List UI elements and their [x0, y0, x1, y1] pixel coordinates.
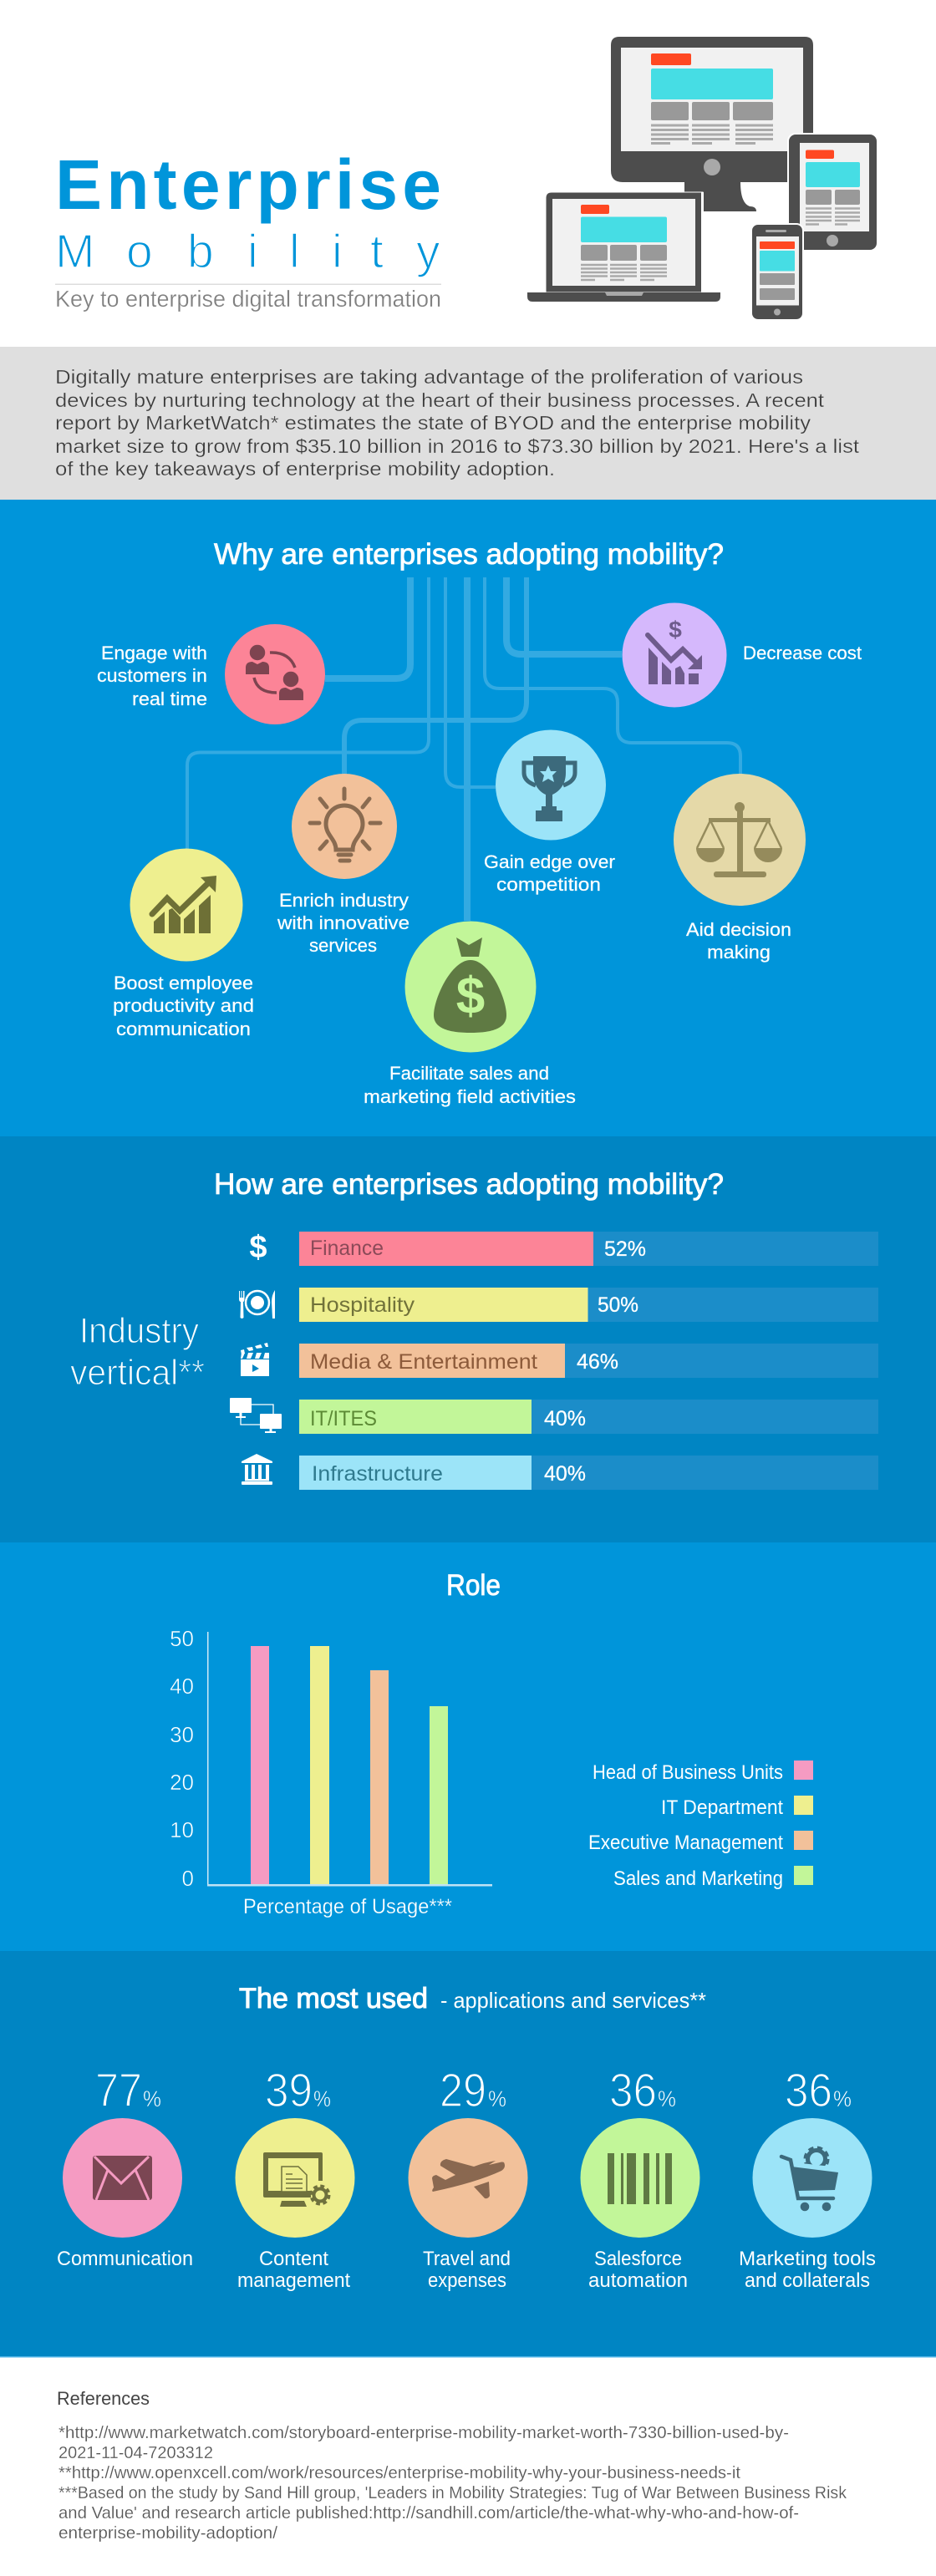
bar row: IT [230, 1398, 878, 1434]
icon: people exchange [246, 644, 303, 700]
bar row: hospitality [239, 1288, 878, 1322]
references: and Value' and research article published:http://sandhill.com/article/the-what-why-who-and-how-of- [58, 2503, 799, 2523]
item: boost productivity [113, 849, 254, 1039]
title block: Enterprise [55, 145, 441, 224]
bar row: infrastructure: 40% [544, 1462, 586, 1486]
item: marketing tools: 36 [785, 2064, 832, 2117]
bar row: media: 46% [577, 1350, 618, 1374]
item: communication [57, 2064, 193, 2270]
heading: why: Why are enterprises adopting mobility? [214, 538, 724, 571]
icon: bank building [242, 1454, 272, 1485]
bar row: infrastructure: Infrastructure [312, 1462, 443, 1486]
bar chart: percentage of usage [170, 1626, 492, 1918]
icon: money bag: $ [456, 968, 485, 1025]
item: travel and expenses: 29 [440, 2064, 486, 2117]
icon: plate and cutlery [239, 1290, 275, 1318]
panel: how adopting mobility [0, 1136, 936, 1542]
item: salesforce automation: Salesforce [594, 2248, 682, 2270]
item: enrich industry: Enrich industry [279, 890, 409, 911]
item: content management: % [313, 2086, 331, 2111]
item: travel and expenses [408, 2064, 528, 2292]
bar chart: percentage of usage: 40 [170, 1674, 194, 1699]
references: *http://www.marketwatch.com/storyboard-enterprise-mobility-market-worth-7330-billion-used-by- [58, 2423, 789, 2442]
label: industry vertical [70, 1311, 205, 1393]
icon: falling chart: $ [669, 617, 682, 643]
item: aid decision: making [707, 942, 771, 963]
icon: growth chart [152, 876, 216, 933]
heading: most used: The most used [239, 1983, 428, 2015]
icon: money bag [434, 937, 506, 1033]
item: facilitate sales: Facilitate sales and [389, 1063, 549, 1084]
panel: role [0, 1542, 936, 1951]
heading: most used: - applications and services** [440, 1988, 706, 2013]
legend: Executive Management [588, 1832, 783, 1854]
item: boost productivity: Boost employee [114, 973, 253, 993]
bar row: media: Media & Entertainment [310, 1350, 537, 1374]
item: travel and expenses: Travel and [423, 2248, 511, 2270]
bar row: hospitality: Hospitality [310, 1293, 415, 1317]
heading: most used [239, 1983, 706, 2015]
bar row: hospitality: 50% [598, 1293, 638, 1317]
item: facilitate sales: marketing field activities [364, 1086, 576, 1107]
icon: balance scale [696, 802, 782, 877]
item: engage with customers [97, 624, 325, 724]
item: engage with customers: real time [132, 688, 207, 709]
item: communication: % [143, 2086, 161, 2111]
icon: desktop monitor [611, 37, 813, 211]
icon: laptop [527, 192, 720, 302]
panel: introduction: Digitally mature enterprises are taking advantage of the proliferation of various [55, 366, 803, 388]
icon: networked computers [230, 1398, 282, 1433]
bar chart: percentage of usage: 0 [182, 1866, 194, 1891]
heading: role: Role [446, 1569, 501, 1602]
references [57, 2388, 847, 2543]
panel: introduction: devices by nurturing technology at the heart of their business processes. A recent [55, 389, 825, 411]
references: References [57, 2388, 150, 2409]
panel: most used applications [0, 1951, 936, 2358]
legend: Sales and Marketing [613, 1867, 783, 1890]
item: marketing tools [739, 2064, 876, 2292]
item: gain edge [484, 730, 615, 895]
bar chart: percentage of usage: 10 [170, 1817, 194, 1842]
bar chart: percentage of usage: 30 [170, 1722, 194, 1747]
panel: introduction: report by MarketWatch* estimates the state of BYOD and the enterprise mobility [55, 412, 811, 434]
bar row: IT: IT/ITES [310, 1407, 377, 1430]
label: industry vertical: Industry [79, 1311, 199, 1351]
heading: how: How are enterprises adopting mobility? [214, 1168, 724, 1201]
item: enrich industry [277, 774, 410, 956]
item: facilitate sales [364, 921, 576, 1107]
item: boost productivity: communication [116, 1019, 251, 1039]
references: **http://www.openxcell.com/work/resources/enterprise-mobility-why-your-business-needs-it [58, 2463, 740, 2482]
panel: introduction: market size to grow from $35.10 billion in 2016 to $73.30 billion by 2021. Here's a list [55, 435, 860, 457]
item: aid decision: Aid decision [686, 919, 791, 940]
bar row: media [241, 1343, 878, 1378]
icon: tablet [788, 134, 878, 251]
icon: falling chart [648, 617, 702, 684]
connector lines [187, 577, 740, 921]
bar row: finance: 52% [604, 1237, 646, 1261]
legend [588, 1761, 813, 1890]
item: content management: management [237, 2269, 350, 2292]
icon: clapperboard [241, 1343, 269, 1376]
icon: envelope [93, 2156, 152, 2200]
icon: monitor with document [263, 2152, 328, 2207]
bar chart: percentage of usage: 50 [170, 1626, 194, 1651]
icon: airplane [432, 2159, 505, 2198]
item: communication: Communication [57, 2248, 193, 2270]
item: gain edge: Gain edge over [484, 851, 615, 872]
bar row: finance [249, 1230, 878, 1266]
title block: Mobility [55, 225, 440, 278]
item: salesforce automation: automation [588, 2269, 688, 2292]
item: marketing tools: and collaterals [745, 2269, 870, 2292]
legend: Head of Business Units [593, 1761, 783, 1784]
item: decrease cost: Decrease cost [743, 643, 862, 663]
icon: dollar: $ [249, 1230, 267, 1265]
item: content management: Content [259, 2248, 328, 2270]
item: salesforce automation [580, 2064, 700, 2292]
item: salesforce automation: 36 [609, 2064, 657, 2117]
item: enrich industry: with innovative [277, 912, 410, 933]
item: engage with customers: customers in [97, 665, 207, 686]
item: content management [236, 2064, 354, 2292]
item: travel and expenses: expenses [428, 2269, 506, 2292]
bar row: IT: 40% [544, 1407, 586, 1430]
bar row: finance: Finance [310, 1237, 384, 1260]
references: enterprise-mobility-adoption/ [58, 2523, 277, 2543]
item: salesforce automation: % [658, 2086, 676, 2111]
item: communication: 77 [95, 2064, 142, 2117]
item: enrich industry: services [309, 935, 377, 956]
icon: shopping cart with gear [781, 2149, 839, 2211]
item: gain edge: competition [496, 874, 601, 895]
item: marketing tools: % [833, 2086, 852, 2111]
title block [55, 145, 441, 312]
item: marketing tools: Marketing tools [739, 2248, 876, 2270]
item: decrease cost [622, 603, 862, 707]
panel: introduction [0, 347, 936, 500]
item: aid decision [674, 774, 806, 963]
icon: trophy [524, 756, 575, 821]
icon: phone [751, 224, 803, 320]
references: 2021-11-04-7203312 [58, 2443, 213, 2462]
bar chart: percentage of usage: Percentage of Usage*** [243, 1895, 452, 1918]
bar chart: percentage of usage: 20 [170, 1770, 194, 1795]
icon: light bulb [310, 789, 380, 861]
panel: why adopting mobility [0, 500, 936, 1136]
icon: responsive devices [527, 37, 878, 320]
bar row: infrastructure [242, 1454, 878, 1490]
item: content management: 39 [265, 2064, 313, 2117]
legend: IT Department [661, 1796, 783, 1819]
references: ***Based on the study by Sand Hill group, 'Leaders in Mobility Strategies: Tug of War Between Business Risk [58, 2483, 847, 2502]
icon: barcode [608, 2153, 672, 2204]
title block: Key to enterprise digital transformation [55, 286, 441, 312]
item: engage with customers: Engage with [101, 643, 207, 663]
item: travel and expenses: % [488, 2086, 506, 2111]
label: industry vertical: vertical** [70, 1353, 205, 1393]
panel: introduction: of the key takeaways of enterprise mobility adoption. [55, 458, 555, 480]
item: boost productivity: productivity and [113, 995, 254, 1016]
